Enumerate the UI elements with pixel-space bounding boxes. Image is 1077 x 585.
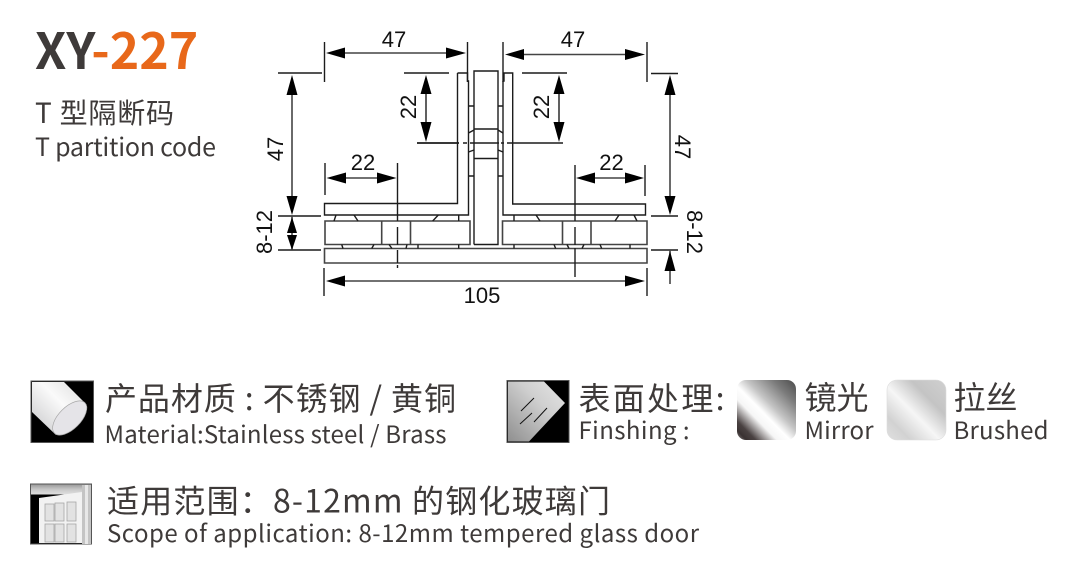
application heading: 适用范围：8-12mm 的钢化玻璃门: [107, 476, 610, 522]
brushed English: Brushed: [954, 411, 1048, 446]
dimension: lower left 22: [325, 150, 396, 195]
subtitle: English name: T partition code: [35, 128, 216, 164]
centre post: [474, 71, 498, 244]
dimension: inner right 22: [522, 73, 567, 142]
dimension: right vertical 47: 47: [670, 135, 695, 159]
right pressure block: [502, 221, 647, 244]
dimension: left vertical 47: [263, 73, 322, 215]
dimension: lower right 22: [576, 150, 645, 196]
gasket details between post and profiles: [468, 106, 503, 176]
rubber pad ticks: [334, 215, 637, 248]
dimension: left 8-12: 8-12: [252, 210, 277, 254]
left L profile: [324, 73, 468, 215]
dimension: top left 47: 47: [382, 27, 406, 52]
dimension: overall 105: [324, 268, 647, 308]
mirror label: 镜光: [804, 373, 868, 419]
dimension: lower right 22: 22: [599, 150, 624, 175]
subtitle: Chinese name: T 型隔断码: [35, 92, 174, 132]
technical drawing: T partition clamp: [252, 27, 707, 308]
material heading: 产品材质 : 不锈钢 / 黄铜: [105, 374, 456, 420]
dimension: top right 47: 47: [561, 27, 585, 52]
brushed label: 拉丝: [954, 373, 1018, 419]
icon: glass door: [30, 484, 92, 544]
dimension: inner left 22: 22: [396, 95, 421, 119]
base plate: [324, 248, 647, 263]
dimension: left vertical 47: 47: [263, 137, 288, 161]
dimension: right vertical 47: [651, 74, 695, 215]
title: model number: XY-227: [35, 12, 198, 84]
mirror English: Mirror: [804, 411, 874, 446]
centre lines: [398, 163, 575, 221]
swatch: mirror finish: [737, 380, 796, 440]
material English: Material:Stainless steel / Brass: [104, 415, 446, 450]
dimension: top right 47: [503, 27, 647, 82]
dimension: right 8-12: [651, 210, 707, 284]
dimension: inner left 22: [396, 73, 459, 143]
application English: Scope of application: 8-12mm tempered glass door: [107, 514, 700, 549]
icon: surface treatment: [507, 380, 569, 442]
dimension: right 8-12: 8-12: [682, 210, 707, 254]
left pressure block: [325, 221, 470, 244]
surface treatment English: Finshing :: [578, 411, 690, 446]
icon: material cylinder: [31, 381, 94, 442]
dimension: inner right 22: 22: [529, 95, 554, 119]
dimension: left 8-12: [252, 210, 321, 254]
right L profile: [503, 73, 646, 215]
dimension: overall 105: 105: [464, 283, 500, 308]
surface treatment heading: 表面处理:: [578, 374, 724, 420]
dimension: top left 47: [324, 27, 468, 82]
dimension: lower left 22: 22: [351, 150, 375, 175]
swatch: brushed finish: [887, 380, 946, 440]
